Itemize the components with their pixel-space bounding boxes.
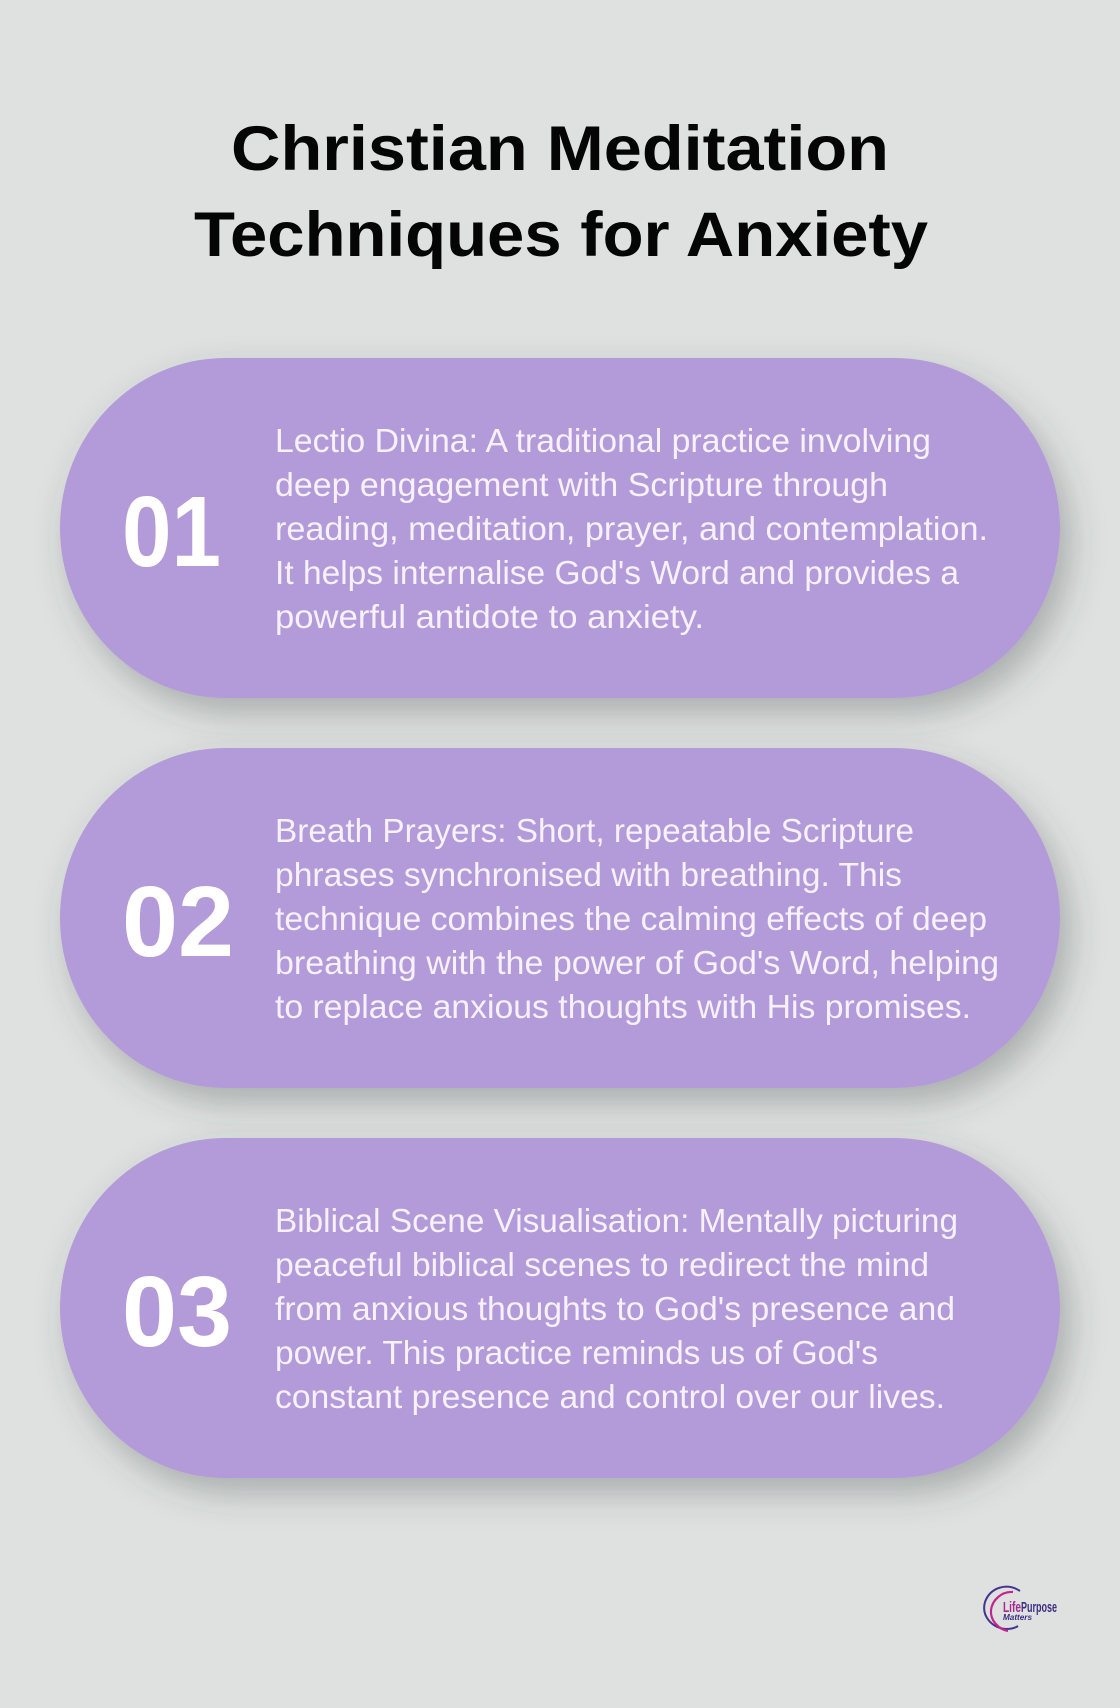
number 03: 03 bbox=[122, 1256, 232, 1368]
text block 02: to replace anxious thoughts with His promises. bbox=[275, 989, 971, 1026]
text block 03: power. This practice reminds us of God's bbox=[275, 1335, 878, 1372]
text block 01 bbox=[275, 423, 988, 636]
text block 03: constant presence and control over our lives. bbox=[275, 1379, 945, 1416]
text block 03: Biblical Scene Visualisation: Mentally picturing bbox=[275, 1203, 958, 1240]
text block 03 bbox=[275, 1203, 958, 1416]
text block 03: peaceful biblical scenes to redirect the mind bbox=[275, 1247, 929, 1284]
panel: step 03 Biblical Scene Visualisation bbox=[60, 1138, 1060, 1478]
text block 03: from anxious thoughts to God's presence and bbox=[275, 1291, 955, 1328]
icon: Life Purpose Matters logo bbox=[984, 1587, 1057, 1631]
text block 02: technique combines the calming effects of deep bbox=[275, 901, 987, 938]
text block 02: Breath Prayers: Short, repeatable Scripture bbox=[275, 813, 914, 850]
text block 02: breathing with the power of God's Word, helping bbox=[275, 945, 999, 982]
text block 01: reading, meditation, prayer, and contemplation. bbox=[275, 511, 988, 548]
text block 02 bbox=[275, 813, 999, 1026]
number 01: 01 bbox=[122, 476, 221, 588]
pill background 03 bbox=[60, 1138, 1060, 1478]
icon: Life Purpose Matters logo: Purpose bbox=[1021, 1600, 1057, 1616]
icon: Life Purpose Matters logo: Matters bbox=[1003, 1613, 1033, 1622]
text block 01: deep engagement with Scripture through bbox=[275, 467, 888, 504]
icon: Life Purpose Matters logo: Life bbox=[1003, 1600, 1021, 1616]
text block 01: It helps internalise God's Word and provides a bbox=[275, 555, 959, 592]
text block 01: Lectio Divina: A traditional practice involving bbox=[275, 423, 931, 460]
panel: step 01 Lectio Divina bbox=[60, 358, 1060, 698]
pill background 01 bbox=[60, 358, 1060, 698]
text block 01: powerful antidote to anxiety. bbox=[275, 599, 704, 636]
panel: step 02 Breath Prayers bbox=[60, 748, 1060, 1088]
title: Techniques for Anxiety bbox=[194, 200, 928, 270]
number 02: 02 bbox=[122, 866, 234, 978]
title: Christian Meditation bbox=[231, 114, 889, 184]
title bbox=[194, 114, 928, 270]
pill background 02 bbox=[60, 748, 1060, 1088]
text block 02: phrases synchronised with breathing. This bbox=[275, 857, 902, 894]
